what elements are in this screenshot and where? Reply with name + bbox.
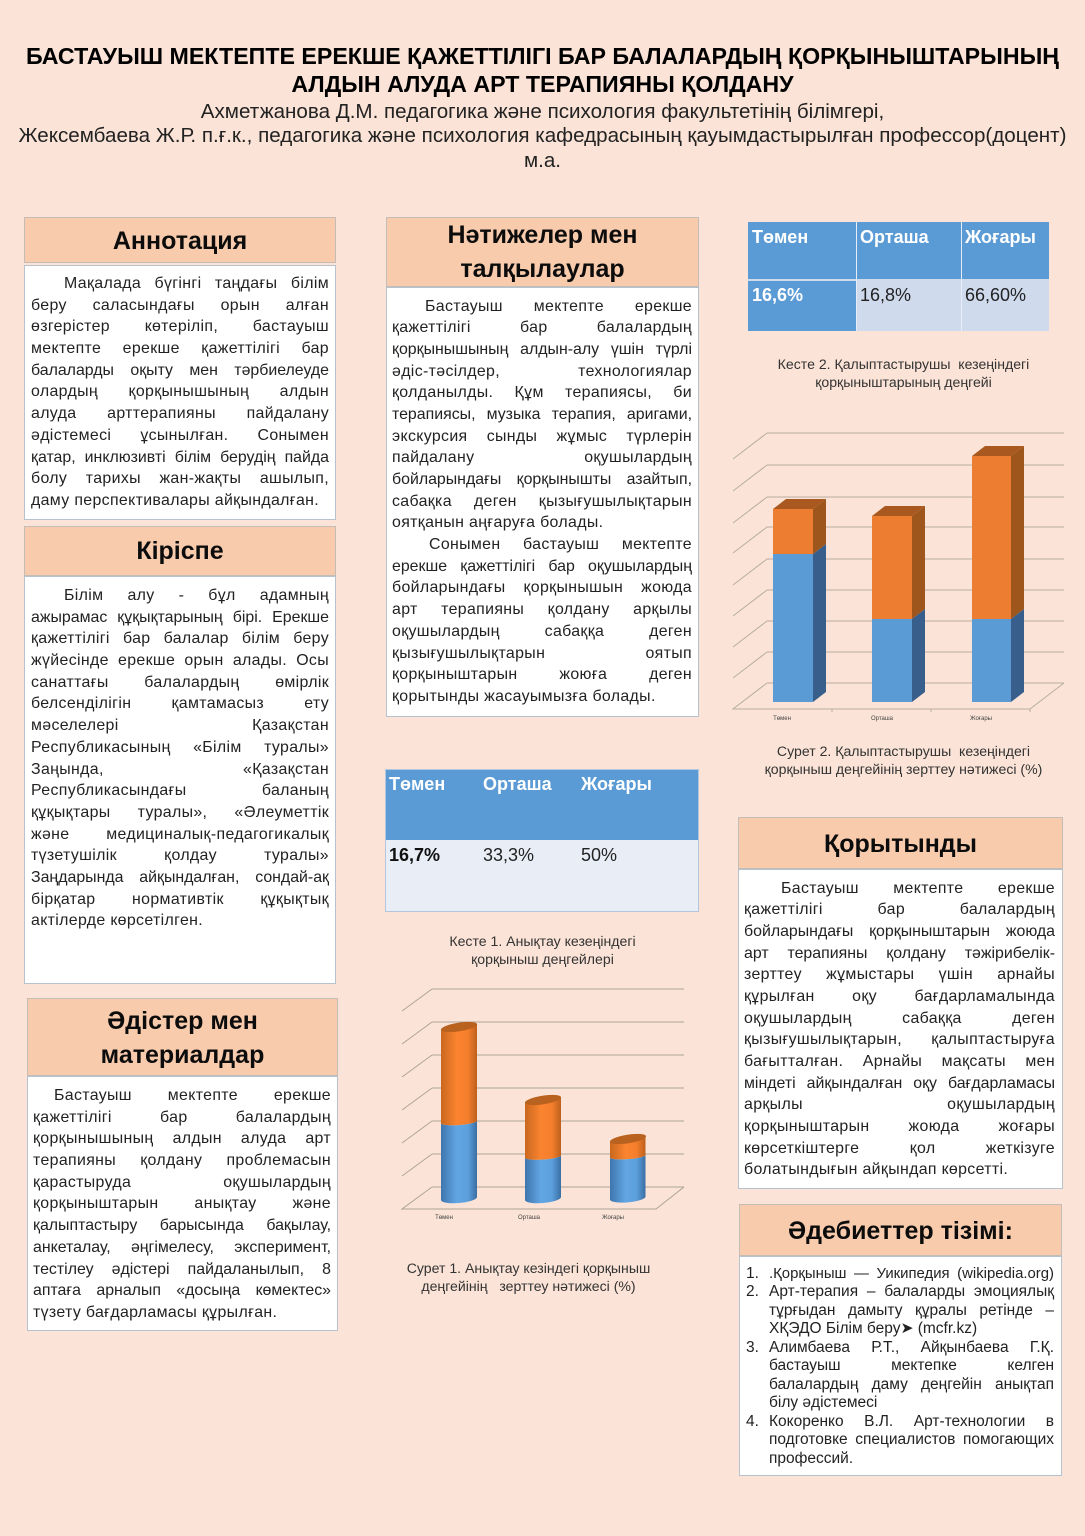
- text: references: Арт-терапия – балаларды эмоциялық: [769, 1283, 1054, 1300]
- text: results: қорқынышының алдын-алу үшін түрлі: [392, 341, 692, 358]
- cylinder: Орташа: [524, 1093, 562, 1203]
- text: introduction: бірқатар нормативтік құқықтық: [31, 891, 329, 908]
- text: references: профессий.: [769, 1450, 853, 1467]
- table 2 header: high: Жоғары: [965, 227, 1036, 247]
- table 2 value: high: 66,60%: [965, 285, 1026, 305]
- heading: introduction: [24, 526, 336, 576]
- text: references: балалардың даму деңгейін анықтап: [769, 1376, 1054, 1393]
- authors: Жексембаева Ж.Р. п.ғ.к., педагогика және психология кафедрасының қауымдастырылған профессор(доцент): [19, 124, 1066, 147]
- panel: references: 3.: [746, 1339, 759, 1356]
- text: conclusion: арт терапияны қолдану тәжірибелік-: [744, 945, 1055, 962]
- text: references: [746, 1264, 1054, 1467]
- table 2 header: medium: Орташа: [860, 227, 929, 247]
- text: references: ХҚЭДО Білім беру➤ (mcfr.kz): [769, 1320, 977, 1337]
- heading: references: Әдебиеттер тізімі:: [788, 1217, 1013, 1245]
- heading: conclusion: Қорытынды: [824, 830, 977, 858]
- text: annotation: беру саласындағы орын алған: [31, 297, 329, 314]
- heading: methods: [27, 998, 338, 1076]
- text: introduction: және медициналық-педагогикалық: [31, 826, 329, 843]
- caption: table 2: Кесте 2. Қалыптастырушы кезеңіндегі: [778, 356, 1029, 372]
- text: results: сабақка деген қызығушылықтарын: [392, 493, 692, 510]
- text: results: бойларындағы қорқынышты азайтып,: [392, 471, 692, 488]
- text: references: Кокоренко В.Л. Арт-технологии в: [769, 1413, 1054, 1430]
- table 1 header: medium: Орташа: [483, 774, 552, 794]
- text: introduction: Заңдарында айқындалған, сондай-ақ: [31, 869, 329, 886]
- table 2 highlighted cell: [748, 281, 856, 331]
- table 2 header row: [748, 222, 1049, 279]
- text: conclusion: бағытталған. Арнайы мақсаты мен: [744, 1053, 1055, 1070]
- text: references: .Қорқыныш — Уикипедия (wikipedia.org): [769, 1266, 1054, 1282]
- axis labels: [435, 1215, 624, 1221]
- text: results: ерекше қажеттілігі бар оқушылардың: [392, 558, 692, 575]
- axis labels: Орташа: [871, 716, 894, 722]
- text: results: қызығушылықтарын оятып: [392, 644, 692, 662]
- heading: results: [386, 217, 699, 287]
- table 2: [748, 222, 1049, 331]
- table 2 value: medium: 16,8%: [860, 285, 911, 305]
- heading: results: талқылаулар: [460, 254, 625, 282]
- text: results: [392, 298, 692, 705]
- text: conclusion: бойларындағы қорқыныштарын жоюда: [744, 923, 1055, 940]
- text: references: бастауыш мектепке келген: [769, 1357, 1054, 1374]
- text: methods: қалыптастыру барысында бақылау,: [33, 1217, 331, 1234]
- table 1 header: high: Жоғары: [581, 774, 652, 794]
- text: introduction: жүйесінде ерекше орын алады. Осы: [31, 652, 329, 669]
- text: methods: қорқыныштарын анықтау және: [33, 1195, 331, 1212]
- heading: introduction: Кіріспе: [136, 537, 224, 565]
- text: results: Бастауыш мектепте ерекше: [425, 298, 692, 314]
- text: results: қорқыныштарын жоюға деген: [392, 666, 692, 683]
- text: conclusion: қызығушылықтарын, қалыптастыруға: [744, 1031, 1055, 1048]
- text: introduction: Республикасының «Білім туралы»: [31, 739, 329, 756]
- heading: methods: материалдар: [101, 1041, 264, 1069]
- panel: conclusion: [738, 817, 1063, 1189]
- axis labels: Жоғары: [602, 1215, 624, 1221]
- cylinder: Жоғары: [609, 1132, 647, 1203]
- table 1 value: low: 16,7%: [389, 845, 440, 865]
- bar: Төмен: [773, 499, 826, 702]
- text: introduction: актілерде көрсетілген.: [31, 912, 203, 929]
- axis labels: Орташа: [518, 1215, 541, 1221]
- text: results: әдіс-тәсілдер, технологиялар: [392, 363, 692, 380]
- caption: figure 1: деңгейінің зерттеу нәтижесі (%): [421, 1278, 636, 1294]
- table 1 header: low: Төмен: [389, 774, 445, 794]
- text: annotation: алуда арттерапияны пайдалану: [31, 405, 329, 422]
- caption: figure 2: Сурет 2. Қалыптастырушы кезеңіндегі: [777, 743, 1030, 759]
- text: introduction: мәселелері Қазақстан: [31, 717, 329, 734]
- bar: Орташа: [872, 506, 925, 702]
- chart: figure 2: [732, 432, 1064, 722]
- text: results: экскурсия сынды жұмыс түрлерін: [392, 428, 692, 445]
- cylinder: Төмен: [440, 1020, 478, 1203]
- heading: annotation: Аннотация: [113, 227, 247, 255]
- axis labels: Жоғары: [970, 716, 992, 722]
- bar: Жоғары: [972, 446, 1024, 702]
- table 1 value: medium: 33,3%: [483, 845, 534, 865]
- text: references: білу әдістемесі: [769, 1394, 877, 1411]
- text: conclusion: зерттеу жұмыстары үшін арнайы: [744, 966, 1055, 983]
- text: conclusion: [744, 880, 1055, 1178]
- text: conclusion: міндеті айқындалған оқу бағдарламасы: [744, 1075, 1055, 1092]
- text: results: пайдалану оқушылардың: [392, 449, 692, 466]
- text: annotation: олардың қорқынышының алдын: [31, 383, 329, 400]
- text: annotation: [31, 275, 329, 509]
- text: results: оқушылардың сабаққа деген: [392, 623, 692, 640]
- title: [26, 43, 1059, 97]
- text: conclusion: қорқыныштарын жоюда жоғары: [744, 1118, 1055, 1135]
- axis labels: [773, 716, 992, 722]
- text: methods: аптаға арналып «досыңа көмектес»: [33, 1282, 331, 1299]
- text: annotation: қатар, инклюзивті білім берудің пайда: [31, 448, 329, 466]
- text: conclusion: арқылы оқушылардың: [744, 1096, 1055, 1113]
- text: methods: түзету бағдарламасы құрылған.: [33, 1304, 277, 1321]
- caption: table 1: қорқыныш деңгейлері: [471, 951, 614, 967]
- authors: [18, 100, 1066, 172]
- heading: methods: Әдістер мен: [107, 1007, 258, 1035]
- table 2 column lines: [856, 222, 857, 331]
- caption: figure 2: [765, 743, 1042, 777]
- text: introduction: қажеттілігі бар балалар білім беру: [31, 630, 329, 647]
- panel: references: [739, 1204, 1062, 1476]
- panel: references: 2.: [746, 1283, 759, 1300]
- title: БАСТАУЫШ МЕКТЕПТЕ ЕРЕКШЕ ҚАЖЕТТІЛІГІ БАР БАЛАЛАРДЫҢ ҚОРҚЫНЫШТАРЫНЫҢ: [26, 43, 1059, 69]
- text: conclusion: көрсеткіштерге қол жеткізуге: [744, 1140, 1055, 1157]
- text: conclusion: құрылған оқу бағдарламалында: [744, 988, 1055, 1005]
- text: methods: Бастауыш мектепте ерекше: [54, 1087, 331, 1104]
- caption: figure 2: қорқыныш деңгейінің зерттеу нәтижесі (%): [765, 761, 1042, 777]
- text: annotation: даму перспективалары айқындалған.: [31, 492, 319, 509]
- panel: references: 4.: [746, 1413, 759, 1430]
- caption: table 1: Кесте 1. Анықтау кезеңіндегі: [449, 933, 636, 949]
- body: annotation: [24, 265, 336, 520]
- authors: м.а.: [524, 148, 561, 172]
- body: conclusion: [738, 869, 1063, 1189]
- text: methods: тестілеу әдістері пайдаланылып, 8: [33, 1260, 331, 1278]
- axis labels: Төмен: [773, 716, 791, 722]
- text: results: қажеттілігі бар балалардың: [392, 319, 692, 336]
- panel: annotation: [24, 217, 336, 520]
- body: references: [739, 1256, 1062, 1476]
- text: conclusion: қажеттілігі бар балалардың: [744, 901, 1055, 918]
- caption: figure 1: [407, 1260, 650, 1294]
- text: methods: анкеталау, әңгімелесу, эксперимент,: [33, 1239, 331, 1256]
- table 1 header row: [386, 770, 698, 840]
- table 1: [385, 769, 699, 912]
- text: results: қолданылды. Құм терапиясы, би: [392, 384, 692, 401]
- text: introduction: ажырамас құқықтарының бірі. Ерекше: [31, 609, 329, 626]
- heading: results: Нәтижелер мен: [447, 221, 638, 249]
- panel: methods: [27, 998, 338, 1331]
- heading: references: [739, 1204, 1062, 1256]
- text: results: оятқанын аңғаруға болады.: [392, 514, 603, 531]
- body: results: [386, 287, 699, 717]
- caption: table 2: [778, 356, 1029, 390]
- text: introduction: санаттағы балалардың өмірлік: [31, 674, 329, 691]
- table 2 value: low: 16,6%: [752, 285, 803, 305]
- text: methods: қарастыруда оқушылардың: [33, 1174, 331, 1191]
- text: introduction: белсенділігін қамтамасыз ету: [31, 695, 329, 712]
- text: references: тұрғыдан дамыту құралы ретінде –: [769, 1302, 1054, 1319]
- heading: conclusion: [738, 817, 1063, 869]
- text: introduction: Білім алу - бұл адамның: [64, 587, 329, 604]
- text: conclusion: Бастауыш мектепте ерекше: [781, 880, 1055, 896]
- caption: table 2: қорқыныштарының деңгейі: [815, 374, 992, 390]
- panel: results and discussion: [386, 217, 699, 717]
- text: annotation: әдістемесі ұсынылған. Сонымен: [31, 427, 329, 444]
- text: annotation: балаларды оқыту мен тәрбиелеуде: [31, 362, 329, 379]
- text: methods: терапияны қолдану проблемасын: [33, 1152, 331, 1169]
- heading: annotation: [24, 217, 336, 263]
- text: references: Алимбаева Р.Т., Айқынбаева Г.Қ.: [769, 1339, 1054, 1356]
- text: results: терапиясы, музыка терапия, аригами,: [392, 406, 692, 423]
- table 1 value: high: 50%: [581, 845, 617, 865]
- text: references: подготовке специалистов помогающих: [769, 1431, 1054, 1448]
- text: results: бойларындағы қорқынышын жоюда: [392, 579, 692, 596]
- panel: introduction: [24, 526, 336, 984]
- text: annotation: Мақалада бүгінгі таңдағы білім: [64, 275, 329, 292]
- text: methods: қорқынышының алдын алуда арт: [33, 1130, 331, 1147]
- axis labels: Төмен: [435, 1215, 453, 1221]
- table 2 column line 2: [961, 222, 962, 331]
- text: introduction: Республикасындағы баланың: [31, 782, 329, 799]
- text: methods: қажеттілігі бар балалардың: [33, 1109, 331, 1126]
- text: introduction: түзетушілік қолдау туралы»: [31, 847, 329, 864]
- text: annotation: болу тарихы жан-жақты ашылып,: [31, 470, 329, 487]
- body: introduction: [24, 576, 336, 984]
- text: results: қорытынды жасауымызға болады.: [392, 688, 656, 705]
- authors: Ахметжанова Д.М. педагогика және психология факультетінің білімгері,: [201, 100, 884, 122]
- text: results: арт терапияны қолдану арқылы: [392, 601, 692, 618]
- caption: table 1: [449, 933, 636, 967]
- text: introduction: құқықтары туралы», «Әлеуметтік: [31, 804, 329, 821]
- text: methods: [33, 1087, 331, 1321]
- text: annotation: өзгерістер көтеріліп, бастауыш: [31, 318, 329, 335]
- text: conclusion: оқушылардың сабаққа деген: [744, 1010, 1055, 1027]
- table 2 header: low: Төмен: [752, 227, 808, 247]
- panel: references: 1.: [746, 1264, 759, 1282]
- text: introduction: [31, 587, 330, 929]
- text: annotation: мектепте ерекше қажеттілігі бар: [31, 340, 329, 357]
- chart: figure 1: [400, 988, 684, 1221]
- text: results: Сонымен бастауыш мектепте: [429, 536, 692, 553]
- text: conclusion: болатындығын айқындап көрсетті.: [744, 1161, 1008, 1178]
- text: introduction: Заңында, «Қазақстан: [31, 760, 329, 778]
- caption: figure 1: Сурет 1. Анықтау кезіндегі қорқыныш: [407, 1260, 650, 1276]
- body: methods: [27, 1076, 338, 1331]
- title: АЛДЫН АЛУДА АРТ ТЕРАПИЯНЫ ҚОЛДАНУ: [291, 71, 794, 97]
